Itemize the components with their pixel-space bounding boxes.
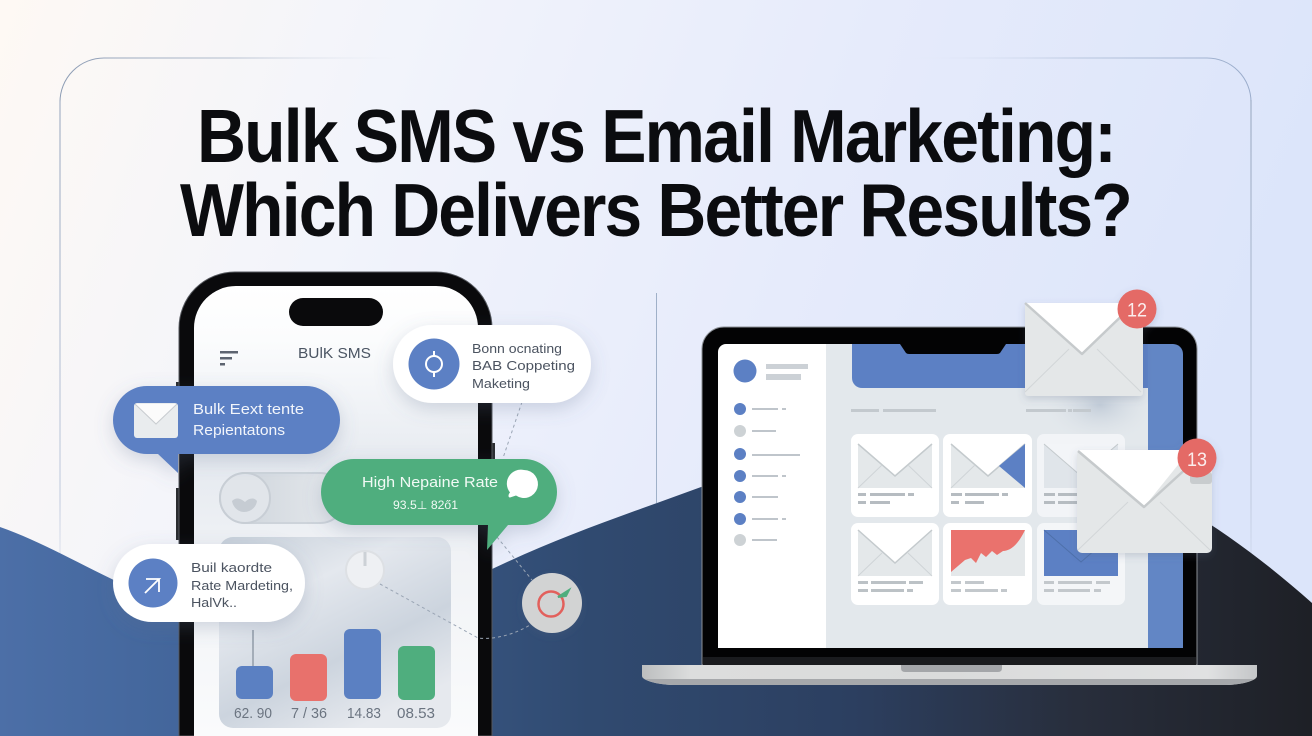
sidebar profile (734, 360, 808, 382)
bar 2 (290, 654, 327, 701)
text: High Nepaine Rate (362, 475, 498, 491)
title: Which Delivers Better Results? (180, 168, 1131, 252)
callout text: HalVk.. (191, 595, 237, 610)
title: Bulk SMS vs Email Marketing: (197, 94, 1115, 178)
bar 1 (236, 666, 273, 699)
dashed connectors (380, 402, 532, 638)
email card 5 (943, 523, 1032, 605)
email card 4 (851, 523, 939, 605)
email card 2 (943, 434, 1032, 517)
laptop (642, 327, 1257, 685)
bar stem (252, 630, 254, 668)
email card 3 (1037, 434, 1125, 517)
callout text: Rate Mardeting, (191, 578, 293, 593)
callout: bottom white (113, 544, 305, 622)
main shading (1040, 365, 1160, 445)
base lip (645, 679, 1254, 685)
rounded frame outline (60, 58, 1251, 600)
floating envelope 12 (1025, 290, 1156, 396)
title (180, 94, 1131, 252)
callout text (472, 341, 575, 391)
arrow icon (128, 558, 178, 608)
phone body (179, 272, 492, 736)
toggle control (220, 473, 345, 523)
bar 4 (398, 646, 435, 700)
phone screen (194, 286, 478, 736)
bar labels: 14.83 (347, 706, 381, 722)
callout text (191, 560, 293, 610)
sidebar menu (734, 403, 800, 546)
text: 93.5⊥ 82ő1 (393, 500, 458, 512)
callout: bulk text (113, 386, 340, 473)
callout text: Buil kaordte (191, 560, 272, 575)
floating envelope 13 (1077, 438, 1216, 553)
badge 13: 13 (1187, 449, 1207, 471)
phone side buttons (176, 382, 495, 540)
bar labels: 08.53 (397, 706, 435, 722)
camera notch (900, 344, 1006, 354)
section rules (851, 409, 1091, 412)
callout text: BAB Coppeting (472, 358, 575, 373)
callout text: Repientatons (193, 423, 285, 439)
callout text (193, 402, 304, 439)
chart panel (219, 537, 451, 728)
callout text: Bulk Eext tente (193, 402, 304, 418)
target icon (408, 338, 460, 390)
base notch (901, 665, 1002, 672)
badge 12: 12 (1127, 300, 1147, 322)
email card 6 (1037, 523, 1125, 605)
bar 3 (344, 629, 381, 699)
email card 1 (851, 434, 939, 517)
laptop base (642, 665, 1257, 685)
dynamic island (289, 298, 383, 326)
sidebar (718, 344, 826, 648)
callout: high response rate (321, 459, 557, 550)
laptop lid (702, 327, 1197, 665)
callout text: Maketing (472, 376, 530, 391)
text (362, 475, 498, 512)
chat icon (507, 470, 538, 498)
bar labels: 7 / 36 (291, 706, 327, 722)
bar labels: 62. 90 (234, 706, 272, 722)
bar labels (234, 706, 435, 722)
menu icon (220, 351, 238, 366)
dark wave background (0, 439, 1312, 736)
smartphone (176, 272, 495, 736)
icon: tomato badge (522, 573, 582, 633)
main area (826, 344, 1148, 648)
dial knob (346, 551, 384, 589)
envelope icon (134, 403, 178, 438)
phone header: BUlK SMS (298, 346, 371, 362)
laptop hinge strip (703, 657, 1196, 665)
vertical divider (656, 293, 657, 503)
callout text: Bonn ocnating (472, 341, 562, 356)
blue header (852, 344, 1148, 388)
callout: top white (393, 325, 591, 403)
right blue column (1148, 344, 1183, 648)
